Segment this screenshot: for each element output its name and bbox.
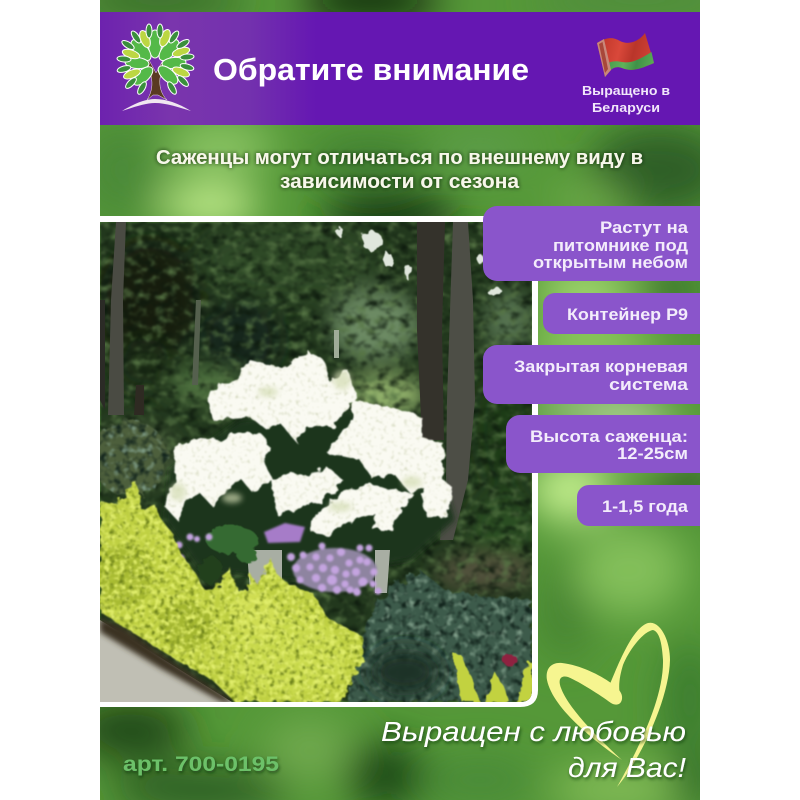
tree trunks [100, 222, 475, 540]
info pill: growing conditions: открытым небом [533, 254, 688, 272]
subtitle: зависимости от сезона [280, 171, 520, 193]
slogan: Выращен с любовью [381, 716, 686, 747]
info pill: root system: Закрытая корневая [514, 358, 688, 376]
sky patches [337, 227, 502, 297]
icon: tree logo [116, 24, 195, 111]
info pill: growing conditions: Растут на [600, 219, 689, 237]
info pill: height: 12-25см [617, 445, 688, 463]
info pill: container [543, 293, 700, 334]
header band [100, 12, 700, 125]
icon: yellow heart [547, 623, 670, 787]
slogan: для Вас! [568, 752, 686, 783]
petunia leaves [198, 526, 258, 584]
red flower [503, 654, 517, 666]
green blurred background [100, 0, 700, 800]
icon: Belarus flag [597, 33, 654, 77]
info pill: root system [483, 345, 700, 404]
hydrangea blooms [165, 350, 452, 535]
left grey shrub [92, 420, 168, 496]
lower right shrubs [345, 570, 532, 702]
small yellow shoots [452, 652, 532, 702]
forest backdrop [90, 220, 541, 702]
info pill: growing conditions: питомнике под [553, 237, 689, 255]
info pill: container: Контейнер Р9 [567, 306, 688, 324]
yellow barberry shrub [97, 480, 363, 702]
flag caption [582, 83, 670, 115]
pot [247, 550, 390, 593]
article number: арт. 700-0195 [123, 753, 279, 776]
dark foliage behind flowers [165, 410, 455, 580]
info pill: age: 1-1,5 года [602, 498, 689, 516]
info pill: height: Высота саженца: [530, 428, 688, 446]
dark under-bush shadow [369, 648, 441, 696]
info pill: age [577, 485, 700, 526]
petunia flowers [174, 523, 382, 596]
title: Обратите внимание [213, 52, 529, 87]
photo frame [100, 216, 538, 707]
flag caption: Беларуси [592, 100, 660, 115]
concrete path [100, 620, 232, 702]
subtitle [156, 147, 643, 193]
photo: hydrangea garden [90, 220, 541, 702]
flag caption: Выращено в [582, 83, 670, 98]
info pill: root system: система [609, 376, 689, 394]
hydrangea shading [170, 370, 422, 512]
info pill: growing conditions [483, 206, 700, 281]
slogan [381, 716, 686, 783]
subtitle: Саженцы могут отличаться по внешнему виду в [156, 147, 643, 169]
info pill: height [506, 415, 700, 473]
